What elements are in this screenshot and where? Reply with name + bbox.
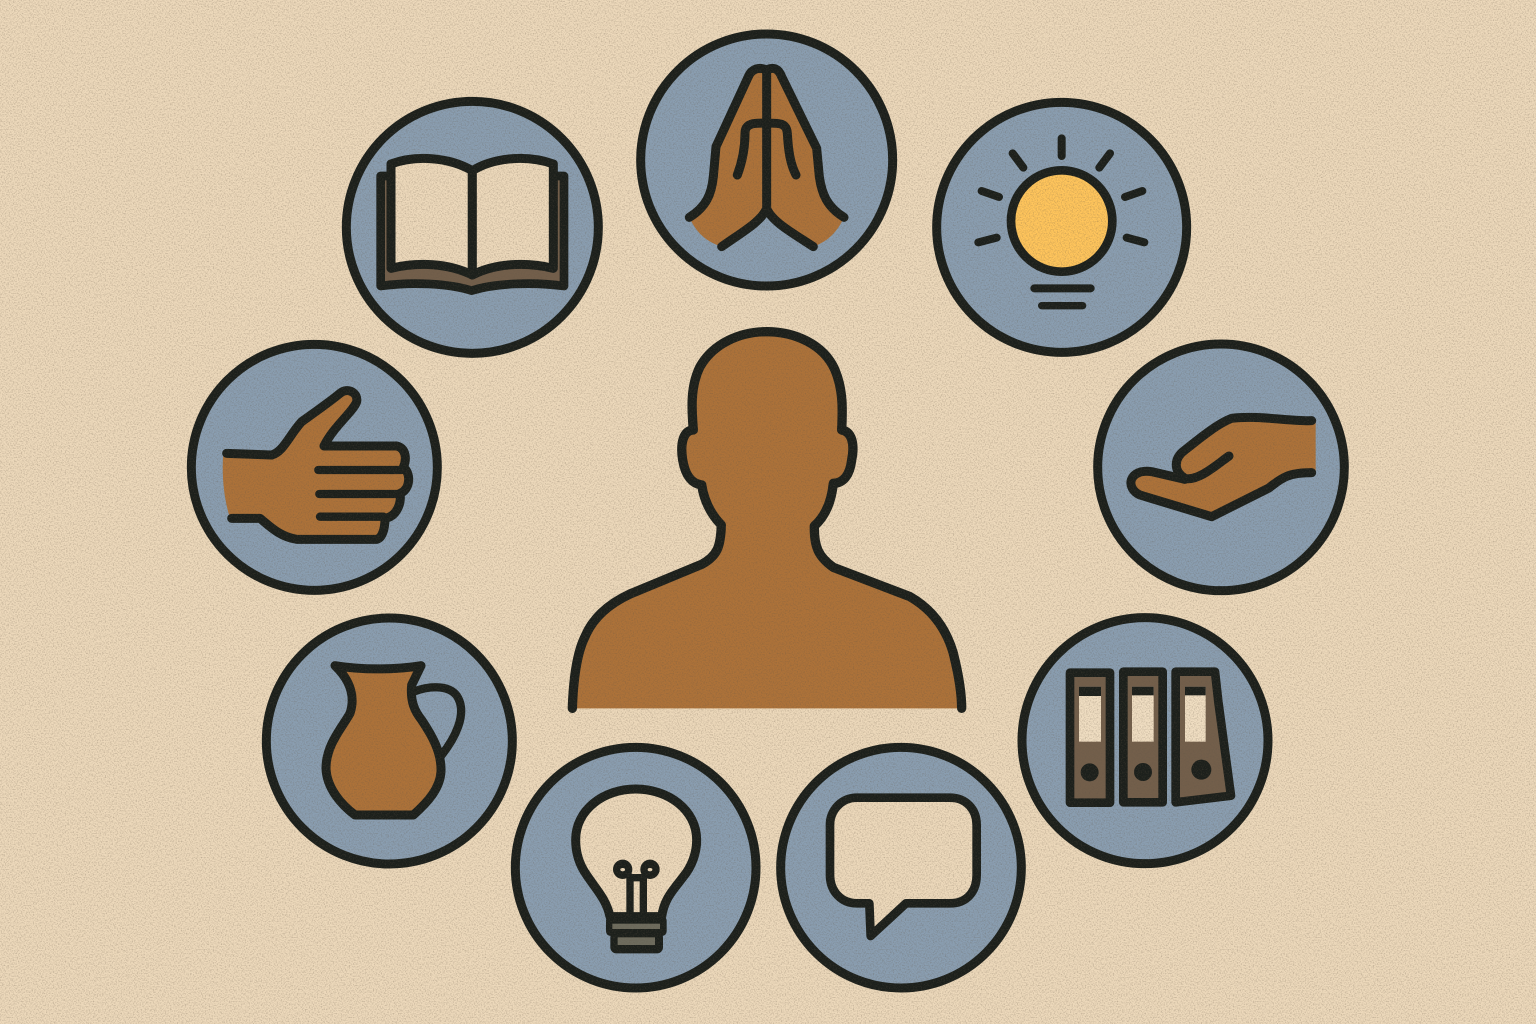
medallion: three binders [1022,618,1268,864]
medallion: thumbs-up style hand [191,344,437,590]
medallion: sun with rays [937,102,1187,352]
medallion: water jug [266,618,512,864]
medallion: praying hands [641,34,893,286]
medallion: speech bubble [781,747,1021,988]
binder three, leaning [1176,672,1231,802]
binder one [1070,673,1110,803]
medallion: open book [346,101,598,353]
binder two [1123,672,1163,802]
medallion: light bulb [515,747,756,988]
medallion: open receiving hand [1098,344,1344,591]
central figure: head and shoulders silhouette [572,332,962,708]
